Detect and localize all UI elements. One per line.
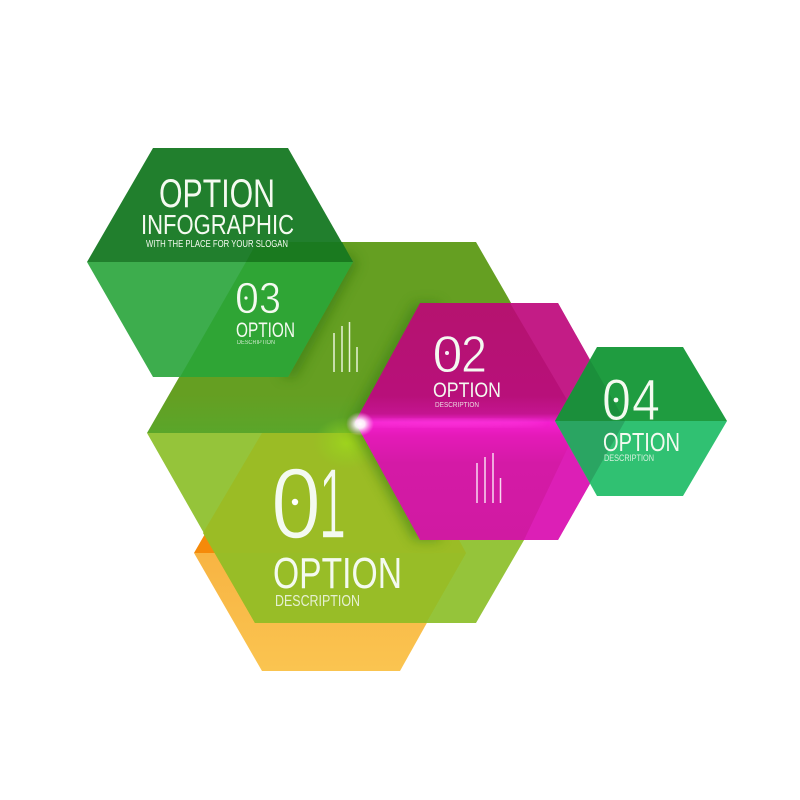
option 02 text: 0 [432,326,462,384]
option 04 text: 0 [602,368,631,433]
panel: dark green hexagon with title [87,148,353,377]
icon: bars on magenta [477,453,500,503]
option 02 text: DESCRIPTION [435,402,479,409]
panel: large green hexagon [147,242,586,623]
option 03 text: DESCRIPTION [237,340,275,346]
panel: green hexagon 04 [555,347,727,496]
option 02 text [432,326,501,409]
title: WITH THE PLACE FOR YOUR SLOGAN [146,239,288,250]
option 02 text: 2 [461,326,487,384]
panel: orange hexagon [194,435,466,671]
option 03 text [235,274,295,346]
option 02 text: OPTION [433,379,501,402]
title: OPTION [159,172,275,216]
option 03 text: 3 [259,274,281,323]
icon: bars on green [334,322,357,372]
option 03 text: 0 [235,274,259,323]
option 04 text: 4 [632,368,660,433]
light flare [346,412,545,436]
option 04 text [602,368,680,463]
panel: magenta hexagon [355,303,625,540]
option 04 text: OPTION [603,427,680,457]
title [141,172,294,250]
shadows cast on the large hexagon [280,250,440,540]
option 01 text: 1 [319,448,346,560]
option 03 text: OPTION [236,319,295,342]
option 01 text [271,448,402,610]
option 01 text: 0 [271,448,321,560]
option 04 text: DESCRIPTION [604,453,654,463]
green glow near the flare [322,422,362,458]
option 01 text: DESCRIPTION [275,593,360,610]
title: INFOGRAPHIC [141,209,294,240]
option 01 text: OPTION [273,549,402,598]
